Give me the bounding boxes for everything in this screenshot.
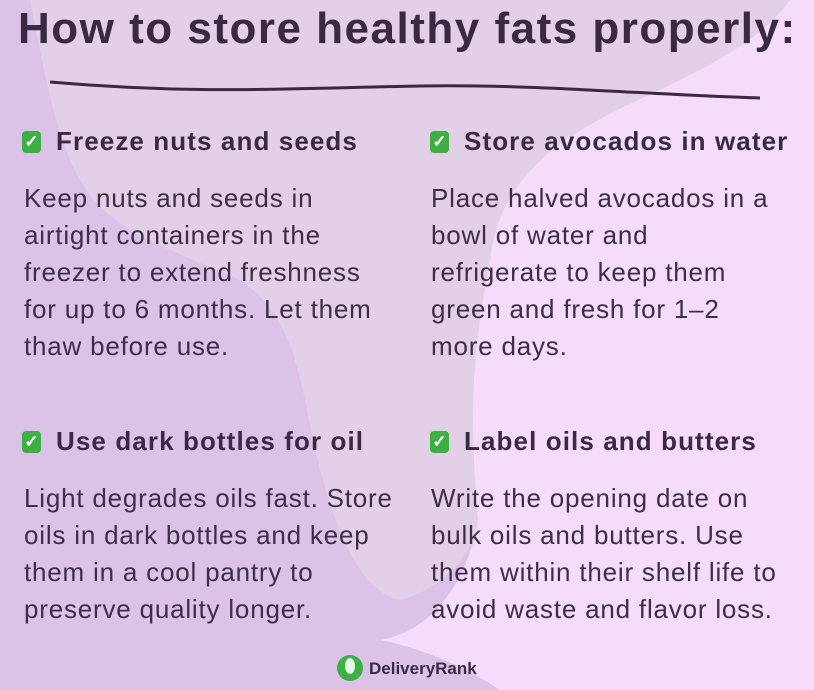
text: label: bulk oils and butters. Use — [431, 520, 744, 550]
heading: avocados: Store avocados in water — [464, 126, 788, 156]
text: avocados: more days. — [431, 331, 568, 361]
heading: dark bottles: ✓ — [24, 432, 39, 450]
heading: freeze: ✓ — [24, 132, 39, 150]
text: avocados: refrigerate to keep them — [431, 257, 726, 287]
text: freeze — [24, 183, 372, 361]
text: freeze: airtight containers in the — [24, 220, 321, 250]
heading: label: Label oils and butters — [464, 426, 757, 456]
text: label: them within their shelf life to — [431, 557, 777, 587]
heading: dark bottles: Use dark bottles for oil — [56, 426, 364, 456]
text: avocados: bowl of water and — [431, 220, 648, 250]
text: dark bottles: preserve quality longer. — [24, 594, 312, 624]
text: freeze: thaw before use. — [24, 331, 229, 361]
text: freeze: freezer to extend freshness — [24, 257, 361, 287]
text: label — [431, 483, 777, 624]
logo — [337, 655, 477, 681]
text: avocados — [431, 183, 768, 361]
text: freeze: Keep nuts and seeds in — [24, 183, 313, 213]
text: label: avoid waste and flavor loss. — [431, 594, 773, 624]
text: dark bottles: oils in dark bottles and keep — [24, 520, 370, 550]
text: dark bottles: Light degrades oils fast. Store — [24, 483, 393, 513]
text: avocados: green and fresh for 1–2 — [431, 294, 720, 324]
text: avocados: Place halved avocados in a — [431, 183, 768, 213]
heading: freeze: Freeze nuts and seeds — [56, 126, 358, 156]
logo: DeliveryRank — [369, 659, 477, 678]
heading: label: ✓ — [432, 432, 447, 450]
text: freeze: for up to 6 months. Let them — [24, 294, 372, 324]
text: dark bottles: them in a cool pantry to — [24, 557, 313, 587]
text: dark bottles — [24, 483, 393, 624]
title: How to store healthy fats properly: — [18, 4, 797, 53]
icon: logo — [337, 655, 363, 681]
heading: avocados: ✓ — [432, 132, 447, 150]
text: label: Write the opening date on — [431, 483, 748, 513]
